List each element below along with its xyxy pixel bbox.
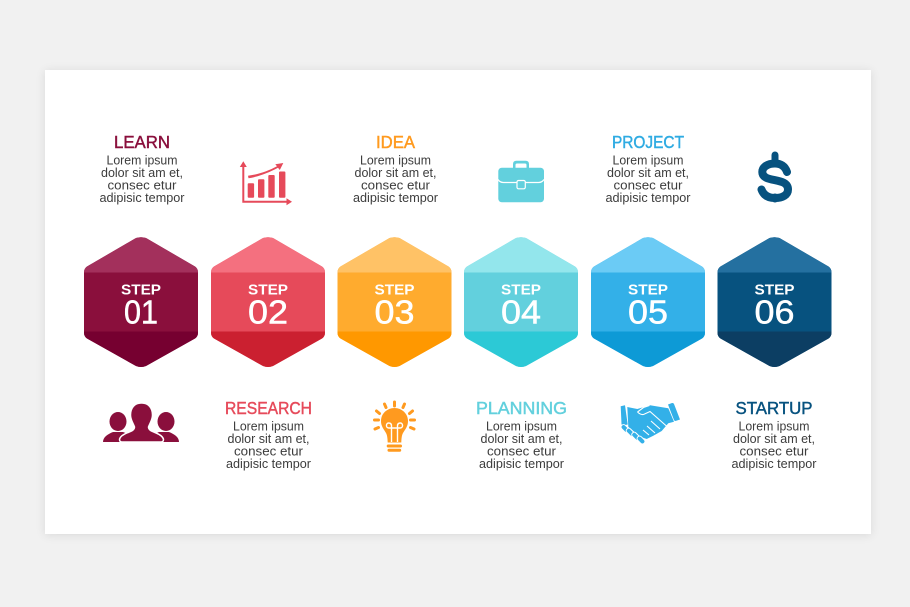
text block: learn: dolor sit am et, (101, 165, 183, 180)
text block: idea (353, 132, 439, 205)
text block: project: adipisic tempor (606, 190, 691, 205)
text block: research: adipisic tempor (226, 456, 312, 471)
text block: project: PROJECT (612, 132, 684, 152)
text block: startup (732, 398, 817, 471)
text block: idea: Lorem ipsum (360, 152, 431, 168)
text block: learn: Lorem ipsum (106, 152, 178, 168)
hexagon step 01: STEP (121, 282, 161, 298)
text block: project: consec etur (614, 178, 683, 192)
icon: briefcase (498, 161, 544, 202)
text block: learn (100, 132, 185, 205)
text block: idea: dolor sit am et, (354, 165, 436, 180)
text block: project: dolor sit am et, (607, 165, 689, 180)
text block: planning: dolor sit am et, (480, 431, 562, 446)
panel: white card (45, 70, 871, 534)
text block: startup: consec etur (740, 444, 809, 458)
hexagon step 02: STEP (248, 282, 288, 298)
hexagon step 01: 01 (124, 294, 158, 330)
hexagon step 04: 04 (501, 294, 541, 330)
icon: dollar sign (762, 155, 788, 199)
hexagon step 06: STEP (755, 282, 794, 298)
text block: planning: Lorem ipsum (486, 418, 557, 434)
text block: planning: PLANNING (476, 398, 567, 418)
hexagon step 05: STEP (628, 282, 668, 298)
hexagon step 03: 03 (374, 294, 414, 330)
text block: idea: adipisic tempor (353, 190, 439, 205)
icon: group of people (103, 403, 179, 442)
text block: research: dolor sit am et, (228, 431, 310, 446)
text block: planning (476, 398, 567, 471)
text block: startup: STARTUP (736, 398, 812, 418)
hexagon step 06 (716, 236, 832, 370)
text block: idea: IDEA (376, 132, 415, 152)
text block: research: RESEARCH (225, 398, 312, 418)
text block: learn: adipisic tempor (100, 190, 185, 205)
hexagon step 04 (463, 236, 579, 370)
icon: handshake (620, 403, 680, 445)
text block: planning: consec etur (487, 444, 557, 458)
text block: project: Lorem ipsum (612, 152, 684, 168)
panel shadow (45, 71, 871, 535)
hexagon step 06: 06 (754, 294, 794, 330)
text block: learn: LEARN (114, 132, 170, 152)
hexagon step 03 (336, 236, 452, 370)
icon: growth chart (240, 161, 292, 205)
text block: research (225, 398, 312, 471)
hexagon step 01 (83, 236, 199, 370)
hexagon step 02 (210, 236, 326, 370)
hexagon step 03: STEP (375, 282, 414, 298)
text block: project (606, 132, 691, 205)
text block: startup: dolor sit am et, (733, 431, 815, 446)
hexagon step 05: 05 (628, 294, 668, 330)
hexagon step 04: STEP (501, 282, 541, 298)
text block: idea: consec etur (361, 178, 431, 192)
text block: research: Lorem ipsum (233, 418, 304, 434)
hexagon step 05 (590, 236, 706, 370)
hexagon step 02: 02 (248, 294, 288, 330)
text block: startup: adipisic tempor (732, 456, 817, 471)
text block: startup: Lorem ipsum (738, 418, 810, 434)
icon: light bulb (374, 402, 414, 452)
text block: research: consec etur (234, 444, 304, 458)
text block: learn: consec etur (108, 178, 177, 192)
text block: planning: adipisic tempor (479, 456, 565, 471)
